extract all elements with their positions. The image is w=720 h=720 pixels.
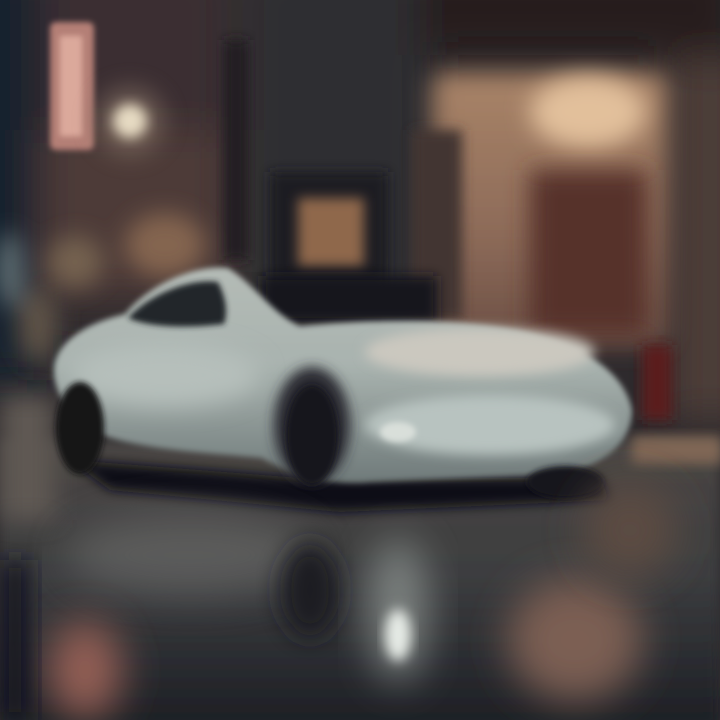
wet ground [0, 395, 720, 720]
car side highlight [70, 343, 260, 407]
warm archway [412, 72, 668, 347]
car front bumper [365, 395, 615, 455]
neon sign: pink vertical [50, 22, 94, 150]
car far wheel [527, 466, 603, 498]
street light glow [96, 87, 164, 155]
car rear wheel [56, 382, 104, 474]
car front wheel arch [274, 367, 350, 483]
car shadow [70, 460, 610, 512]
car headlight [380, 422, 416, 442]
central garage window [270, 172, 388, 297]
white car [54, 267, 632, 512]
car windshield [128, 281, 226, 326]
car front wheel [286, 385, 338, 485]
left storefront lights [0, 213, 205, 363]
reflections on the wet ground [0, 482, 678, 720]
car hood highlight [365, 328, 595, 376]
red object at right [642, 345, 672, 420]
building: dark pillar [224, 40, 248, 260]
dark area behind car [262, 276, 437, 322]
car body [54, 267, 632, 483]
